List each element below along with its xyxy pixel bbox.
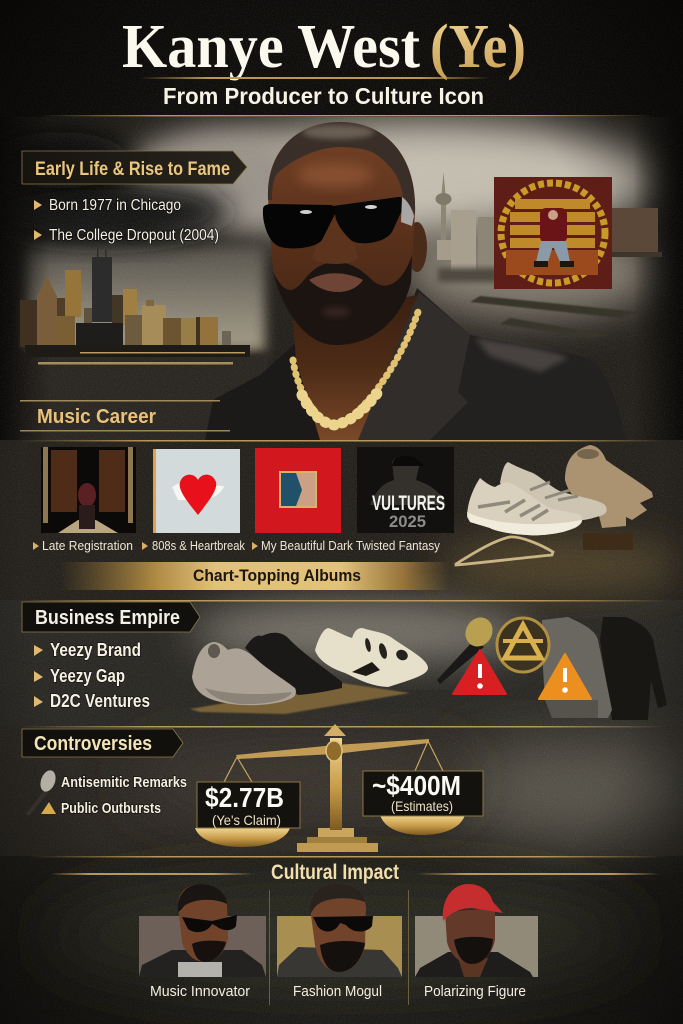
bullet: yeezy gap: Yeezy Gap	[50, 666, 125, 686]
jacket	[277, 947, 402, 977]
album: The College Dropout	[494, 177, 612, 289]
album: Vultures 2025: 2025	[389, 512, 426, 531]
sunglasses	[263, 197, 414, 248]
business empire heading: Business Empire	[35, 607, 180, 629]
right pan	[380, 815, 465, 835]
white sneaker	[315, 628, 428, 687]
early life heading: Early Life & Rise to Fame	[35, 159, 230, 180]
value box: estimates	[363, 770, 483, 816]
jacket lapel	[358, 292, 470, 440]
post	[330, 738, 342, 830]
album: My Beautiful Dark Twisted Fantasy	[255, 448, 341, 533]
album labels: My Beautiful Dark Twisted Fantasy	[261, 538, 440, 553]
head	[268, 122, 415, 345]
chart-topping albums band	[60, 562, 450, 590]
card: polarizing figure	[415, 884, 538, 1000]
yeezy sneakers	[190, 628, 428, 714]
card label: Music Innovator	[150, 983, 250, 1000]
title: Kanye West	[122, 13, 420, 81]
hero divider	[40, 115, 655, 116]
grey sneaker	[192, 642, 296, 705]
value box: estimates: (Estimates)	[391, 798, 453, 814]
left pan	[195, 828, 290, 847]
beam	[236, 739, 429, 759]
hero backdrop haze	[0, 117, 683, 444]
cultural impact heading: Cultural Impact	[271, 861, 399, 884]
panel: early life	[22, 151, 247, 244]
album: Late Registration	[41, 447, 136, 533]
front sneaker	[467, 478, 582, 535]
red cap	[443, 884, 503, 921]
jacket	[205, 343, 330, 440]
neck and chest	[293, 295, 419, 440]
coat	[565, 445, 653, 528]
gold chain	[293, 312, 418, 425]
subtitle: From Producer to Culture Icon	[163, 83, 484, 109]
warning: red triangle	[453, 650, 506, 694]
chains	[224, 741, 443, 782]
value box: ye's claim	[197, 782, 300, 828]
controversies heading: Controversies	[34, 733, 152, 755]
bullet: born 1977: Born 1977 in Chicago	[49, 197, 181, 214]
right skyline	[436, 172, 662, 338]
grey jacket	[542, 617, 612, 718]
head	[445, 908, 495, 964]
portrait: Kanye West	[205, 122, 626, 440]
head	[310, 884, 366, 972]
album: Vultures 2025: VULTURES	[372, 492, 445, 515]
title: (Ye)	[430, 13, 526, 81]
card: fashion mogul	[277, 884, 402, 1000]
forehead highlight	[297, 163, 373, 187]
value box: ye's claim: $2.77B	[205, 782, 284, 813]
medal	[497, 618, 549, 672]
merch: sneakers and coat	[456, 445, 653, 565]
controversies heading	[22, 729, 183, 757]
ear	[407, 222, 427, 272]
chart-topping albums band: Chart-Topping Albums	[193, 566, 361, 585]
icon: microphone	[26, 768, 58, 816]
head	[178, 884, 228, 962]
bullet: yeezy brand: Yeezy Brand	[50, 640, 141, 660]
bullet: public outbursts: Public Outbursts	[61, 800, 161, 817]
warning: orange triangle	[539, 654, 591, 699]
tan floor patch	[190, 683, 410, 714]
card: music innovator	[139, 884, 266, 1000]
business empire heading	[22, 602, 200, 632]
microphone	[437, 613, 498, 684]
beard	[273, 255, 412, 345]
section divider	[20, 440, 665, 442]
album: 808s & Heartbreak	[153, 449, 240, 533]
nose	[312, 222, 358, 264]
panel: business empire	[22, 602, 200, 711]
early life heading	[22, 151, 247, 184]
album: Vultures 2025	[357, 447, 454, 533]
base	[297, 843, 378, 852]
album labels: Late Registration	[42, 538, 133, 553]
balance scale	[195, 724, 483, 852]
dark jacket	[600, 617, 667, 720]
wood plank	[583, 533, 633, 550]
section divider	[30, 856, 665, 858]
card label: Fashion Mogul	[293, 983, 382, 1000]
panel: controversies	[22, 729, 187, 817]
short hair	[268, 122, 415, 214]
album labels: 808s & Heartbreak	[152, 538, 245, 553]
fashion and warning icons	[437, 613, 667, 720]
black sneaker	[245, 633, 342, 695]
card label: Polarizing Figure	[424, 983, 526, 1000]
jacket	[415, 952, 533, 977]
section divider	[20, 600, 665, 602]
album labels	[33, 538, 440, 553]
value box: estimates: ~$400M	[372, 770, 461, 801]
jacket	[139, 950, 266, 977]
bullet: d2c ventures: D2C Ventures	[50, 691, 150, 711]
bullet: antisemitic remarks: Antisemitic Remarks	[61, 774, 187, 791]
bullet: the college dropout: The College Dropout (2004)	[49, 227, 219, 244]
left skyline	[20, 248, 250, 364]
music career heading: Music Career	[37, 406, 156, 428]
value box: ye's claim: (Ye's Claim)	[212, 812, 281, 828]
hanger	[456, 537, 553, 565]
section divider	[20, 726, 665, 728]
back sneaker	[500, 462, 607, 520]
mouth	[309, 273, 363, 292]
title divider	[140, 77, 490, 79]
